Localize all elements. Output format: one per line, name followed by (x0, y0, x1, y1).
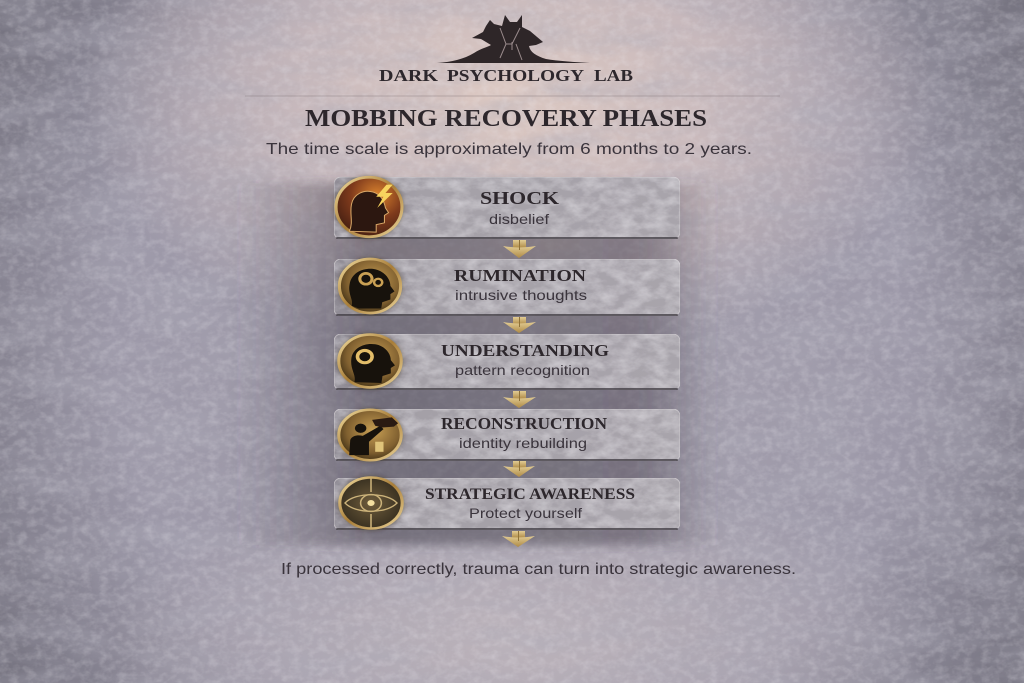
subtitle: The time scale is approximately from 6 months to 2 years. (266, 141, 752, 158)
rumination title: RUMINATION (454, 266, 587, 285)
arrow 5 (502, 531, 535, 547)
logo: three-headed dog (437, 15, 590, 63)
understanding title: UNDERSTANDING (441, 341, 609, 360)
strategic awareness title: STRATEGIC AWARENESS (425, 486, 635, 503)
reconstruction subtitle: identity rebuilding (459, 435, 587, 451)
arrow 3 (503, 391, 536, 408)
icon: eye (339, 477, 403, 529)
shadow behind phase stack (235, 183, 715, 545)
panel: shock (334, 176, 680, 239)
brand name: LAB (594, 66, 633, 85)
understanding subtitle: pattern recognition (455, 362, 590, 378)
divider (245, 96, 780, 97)
closing note: If processed correctly, trauma can turn into strategic awareness. (281, 561, 796, 578)
icon: head with lightning (335, 176, 403, 238)
panel: understanding (334, 334, 680, 390)
rumination subtitle: intrusive thoughts (455, 287, 587, 303)
brand name: DARK (379, 66, 439, 85)
shock subtitle: disbelief (489, 211, 549, 227)
panel: reconstruction (334, 409, 680, 461)
reconstruction title: RECONSTRUCTION (441, 414, 608, 433)
arrow 2 (503, 317, 536, 333)
shock title: SHOCK (480, 188, 559, 208)
strategic awareness subtitle: Protect yourself (469, 505, 582, 521)
arrow 4 (503, 461, 535, 477)
title: MOBBING RECOVERY PHASES (305, 106, 707, 132)
brand name (379, 66, 633, 85)
icon: head with sun gear (338, 334, 402, 388)
brand name: PSYCHOLOGY (447, 66, 584, 85)
panel: rumination (334, 258, 680, 316)
icon: figure rebuilding (338, 409, 402, 461)
icon: head with gears (338, 258, 402, 314)
arrow 1 (503, 240, 536, 258)
panel: strategic awareness (334, 477, 680, 530)
